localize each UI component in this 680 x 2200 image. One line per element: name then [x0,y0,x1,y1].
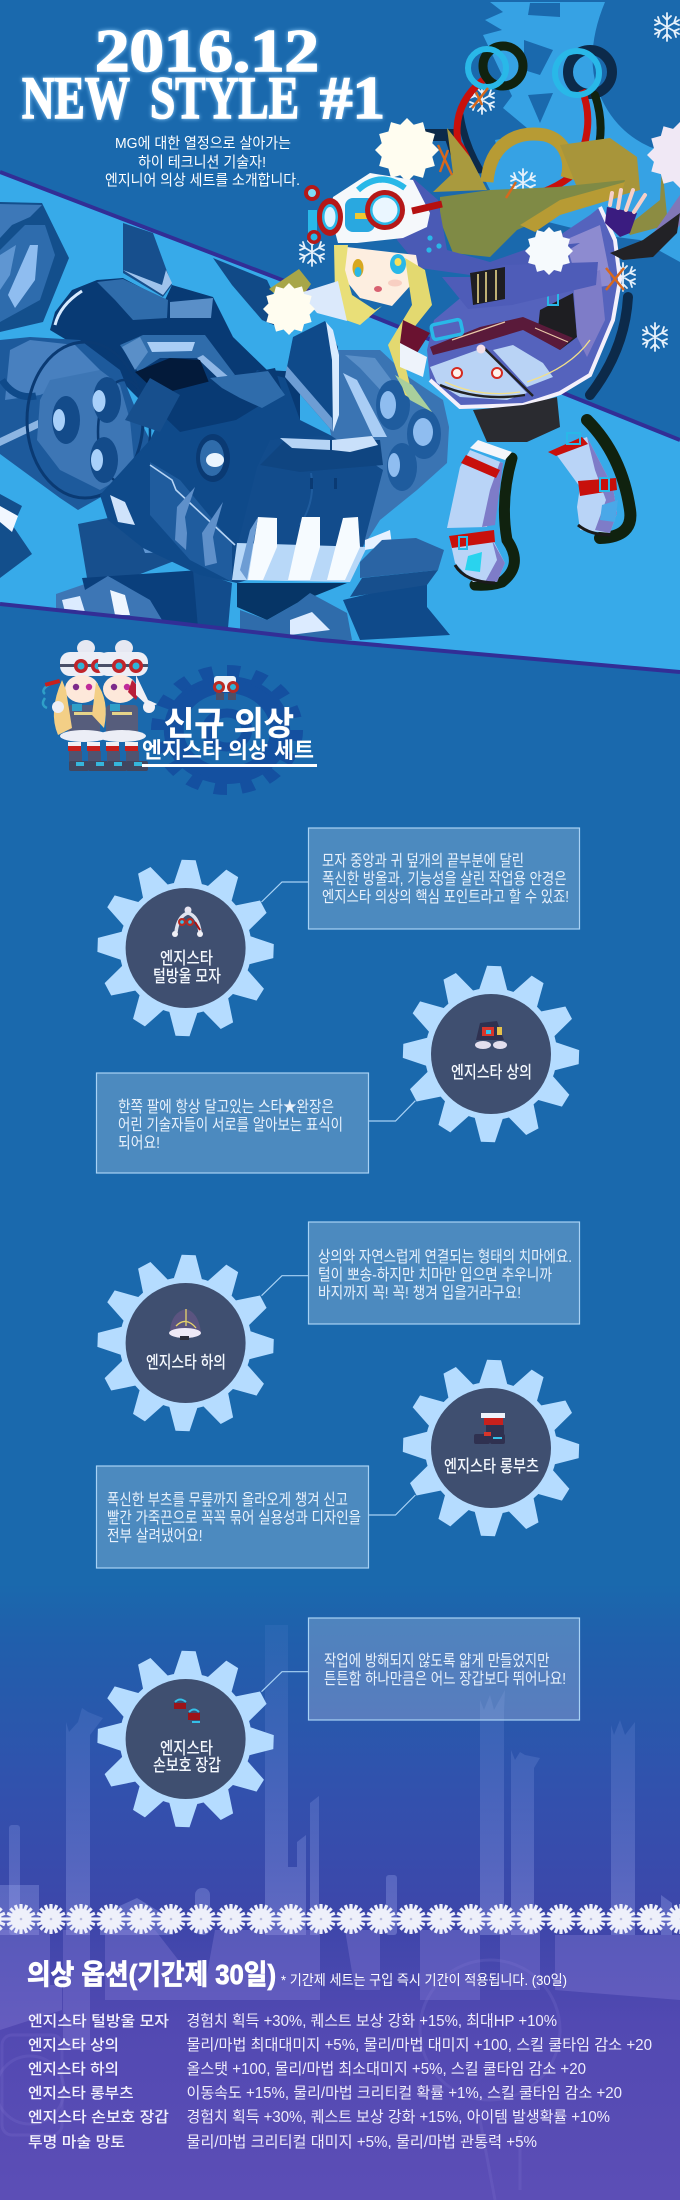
row: gloves: 경험치 획득 +30%, 퀘스트 보상 강화 +15%, 아이템 발생확률 +10% [186,2108,610,2126]
gear label: 털방울 모자 [153,967,221,986]
gear label: 손보호 장갑 [153,1756,221,1775]
gear strip divider [0,1904,680,1934]
icon: top [475,1021,507,1049]
robot eye [196,434,230,482]
description text: 전부 살려냈어요! [107,1527,202,1545]
gear badge [97,860,274,1036]
connector line [262,1672,308,1692]
robot upper block [50,278,300,420]
sleeves and gloves [263,122,680,377]
machinery silhouette lower [0,1930,680,2050]
description text [118,1098,343,1152]
description text: 한쪽 팔에 항상 달고있는 스타★완장은 [118,1098,334,1116]
character shadows [425,46,630,585]
hair mass [433,128,680,257]
faint machine details [0,1960,560,2200]
header backdrop gear [158,671,296,789]
robot back arm [213,258,292,333]
row: boots: 엔지스타 롱부츠 [28,2085,134,2102]
item 3: bottom [97,1222,579,1431]
anime engineer character [263,46,680,585]
icon: skirt [169,1309,201,1340]
red hair avatar sprite [98,640,157,771]
row: hat: 엔지스타 털방울 모자 [28,2013,169,2030]
gear badge [403,1360,579,1536]
snowflakes [300,13,679,351]
robot horn [285,321,339,432]
icon: gloves [174,1700,200,1722]
gear badge [97,1255,274,1431]
decorative big gear on dark band [480,2,680,262]
main title: NEW [22,65,130,131]
description box [308,828,580,929]
main title: STYLE [150,65,299,131]
robot teeth [232,517,367,582]
description text: 어린 기술자들이 서로를 알아보는 표식이 [118,1116,343,1134]
connector line [262,1276,308,1296]
hero subtitle: MG에 대한 열정으로 살아가는 [115,135,291,152]
hero illustration [0,2,680,672]
description text: 폭신한 방울과, 기능성을 살린 작업용 안경은 [322,870,567,888]
hero subtitle: 하이 테크니션 기술자! [138,154,266,171]
description text [322,852,569,906]
description box [308,1222,580,1324]
item 4: long boots [96,1360,579,1568]
robot spine [123,223,172,297]
goggles [304,179,442,244]
description text: 되어요! [118,1134,160,1152]
hero subtitle [105,135,300,189]
description box [96,1073,368,1173]
right leg boot [548,433,618,535]
description text: 모자 중앙과 귀 덮개의 끝부분에 달린 [322,852,524,870]
goggle straps [457,80,588,200]
city silhouette background [0,1625,672,1935]
row: bottom [28,2060,586,2078]
row: hat: 경험치 획득 +30%, 퀘스트 보상 강화 +15%, 최대HP +10% [186,2012,557,2030]
shorts [473,397,560,442]
options note: * 기간제 세트는 구입 즉시 기간이 적용됩니다. (30일) [281,1972,567,1988]
row: cape: 투명 마술 망토 [28,2134,125,2151]
gear label: 엔지스타 [160,1739,213,1758]
item 5: hand guard gloves [97,1618,579,1827]
row: top [28,2036,652,2054]
robot left hex plate [0,202,69,332]
robot jaw and feet [237,530,450,640]
item 2: top [96,966,579,1173]
coat body [427,207,620,407]
row: hat [28,2012,557,2030]
main title [22,18,385,131]
row: gloves [28,2108,610,2126]
row: boots: 이동속도 +15%, 물리/마법 크리티컬 확률 +1%, 스킬 쿨타임 감소 +20 [186,2084,622,2102]
description text [318,1248,572,1302]
description box [96,1466,368,1568]
description text [324,1652,566,1688]
row: top: 물리/마법 최대대미지 +5%, 물리/마법 대미지 +100, 스킬 쿨타임 감소 +20 [186,2036,652,2054]
row: gloves: 엔지스타 손보호 장갑 [28,2109,169,2126]
section header: new outfit [43,640,317,789]
robot lower left parts [0,494,232,628]
robot cannon drum [0,337,150,510]
robot dome [330,350,449,547]
header underline [142,764,317,767]
row: boots [28,2084,622,2102]
blonde avatar sprite [43,640,110,771]
robot mech [0,202,450,640]
gear label: 엔지스타 상의 [451,1063,532,1082]
description text: 튼튼함 하나만큼은 어느 장갑보다 뛰어나요! [324,1670,566,1688]
gear label: 엔지스타 [160,949,213,968]
options table [28,2012,652,2151]
description text: 작업에 방해되지 않도록 얇게 만들었지만 [324,1652,550,1670]
main title: 2016.12 [95,18,319,84]
outfit set icon [213,676,239,700]
gear label [153,949,221,986]
item 1: fur pompom hat [97,828,579,1036]
light blue diagonal band [0,172,680,672]
description text [107,1491,361,1545]
description box [308,1618,580,1720]
description text: 상의와 자연스럽게 연결되는 형태의 치마에요. [318,1248,572,1266]
row: bottom: 올스탯 +100, 물리/마법 최소대미지 +5%, 스킬 쿨타임 감소 +20 [186,2060,586,2078]
icon: hat [172,906,203,937]
connector line [262,882,308,902]
row: cape: 물리/마법 크리티컬 대미지 +5%, 물리/마법 관통력 +5% [186,2133,537,2151]
gear label [153,1739,221,1775]
connector line [369,1495,415,1515]
orange patches [438,88,624,290]
options heading: 의상 옵션(기간제 30일) [27,1959,276,1990]
gear label: 엔지스타 롱부츠 [444,1457,539,1476]
hat [330,118,580,275]
row: cape [28,2133,537,2151]
robot cheek and tusks [150,462,235,582]
robot face [260,435,383,546]
header title: 신규 의상 [164,697,294,745]
gear badge [403,966,579,1142]
face and hair locks [334,245,432,412]
gear badge [97,1651,274,1827]
gear label: 엔지스타 하의 [146,1353,226,1372]
header subtitle: 엔지스타 의상 세트 [142,733,314,765]
icon: boots [474,1413,505,1444]
connector line [369,1101,415,1121]
main title: #1 [320,65,385,131]
description text: 털이 뽀송-하지만 치마만 입으면 추우니까 [318,1266,552,1284]
band edge lines [0,172,680,672]
row: top: 엔지스타 상의 [28,2037,119,2054]
ear rings [468,49,599,95]
left leg boot [447,440,512,583]
row: bottom: 엔지스타 하의 [28,2061,119,2078]
description text: 바지까지 꼭! 꼭! 챙겨 입을거라구요! [318,1284,521,1302]
description text: 폭신한 부츠를 무릎까지 올라오게 챙겨 신고 [107,1491,348,1509]
description text: 엔지스타 의상의 핵심 포인트라고 할 수 있죠! [322,888,569,906]
robot central body [100,368,383,583]
description text: 빨간 가죽끈으로 꼭꼭 묶어 실용성과 디자인을 [107,1509,361,1527]
hero subtitle: 엔지니어 의상 세트를 소개합니다. [105,172,300,189]
